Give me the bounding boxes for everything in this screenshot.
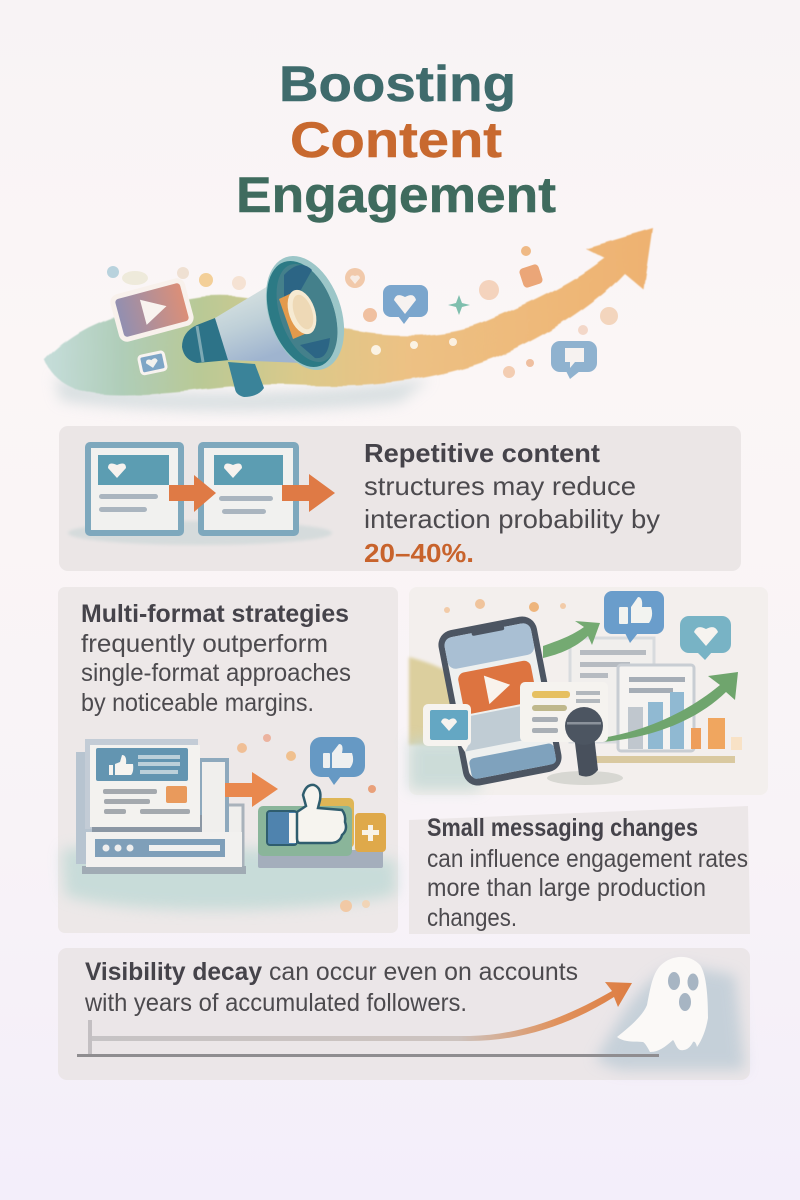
floating hearts and chat bubbles xyxy=(107,246,618,379)
sparkle dots xyxy=(237,734,376,912)
wash shadow xyxy=(55,375,430,410)
illustration: stacked content to thumbs up xyxy=(62,734,396,912)
heart chat tile xyxy=(423,704,471,752)
orange ring xyxy=(279,291,312,339)
text: repetitive content xyxy=(364,438,660,568)
orange dots xyxy=(444,599,566,613)
text: visibility decay xyxy=(84,958,578,1017)
ghost wash xyxy=(595,965,745,1070)
stacked documents xyxy=(76,739,246,874)
text: repetitive content: structures may reduce xyxy=(364,471,636,501)
icon: repeated content cards with arrows xyxy=(68,445,335,545)
text: multi-format strategies: frequently outperform xyxy=(81,630,328,658)
text: multi-format strategies: single-format approaches xyxy=(81,659,351,687)
text: small messaging changes xyxy=(427,814,748,932)
text: small messaging changes: Small messaging changes xyxy=(427,814,698,842)
text: visibility decay: can occur even on accounts xyxy=(269,958,578,986)
text: repetitive content: interaction probability by xyxy=(364,504,660,534)
phone xyxy=(436,614,564,788)
title xyxy=(236,56,556,223)
ghost xyxy=(617,957,708,1052)
panel: small messaging changes xyxy=(409,806,750,934)
back documents xyxy=(570,638,694,751)
text: multi-format strategies: by noticeable margins. xyxy=(81,689,314,717)
text: visibility decay: Visibility decay xyxy=(85,958,262,986)
rising arrow xyxy=(45,228,653,395)
handle xyxy=(228,362,264,397)
title: Boosting xyxy=(279,56,516,112)
megaphone xyxy=(182,245,358,397)
rear band xyxy=(182,318,230,363)
panel: multi-format illustration with phone xyxy=(409,587,768,795)
panel: repetitive content xyxy=(59,426,741,571)
hero illustration: megaphone with rising arrow xyxy=(45,228,653,410)
panel: visibility decay xyxy=(58,948,750,1080)
cone xyxy=(215,286,302,363)
arrow xyxy=(225,772,278,807)
bell opening xyxy=(265,256,349,370)
title: Engagement xyxy=(236,167,556,223)
text: small messaging changes: can influence engagement rates xyxy=(427,845,748,873)
bell rim xyxy=(252,245,358,381)
text: visibility decay: with years of accumulated followers. xyxy=(84,989,467,1017)
text: repetitive content: 20–40%. xyxy=(364,538,474,568)
content card xyxy=(520,682,608,742)
title: Content xyxy=(290,112,502,168)
heart bubble xyxy=(680,616,731,660)
text: multi-format strategies: Multi-format strategies xyxy=(81,600,349,628)
text: small messaging changes: changes. xyxy=(427,904,517,932)
panel: multi-format strategies xyxy=(58,587,398,933)
green arrows xyxy=(543,621,600,658)
text: repetitive content: Repetitive content xyxy=(364,438,600,468)
thumbs up card xyxy=(258,785,386,868)
text: multi-format strategies xyxy=(81,600,351,717)
decay chart xyxy=(77,982,659,1057)
like bubble xyxy=(604,591,664,643)
chat bubble with thumbs up xyxy=(310,737,365,785)
mini bar chart xyxy=(691,718,742,750)
small heart tile xyxy=(138,351,167,374)
text: small messaging changes: more than large production xyxy=(427,874,706,902)
microphone xyxy=(547,707,623,785)
video tile xyxy=(112,279,192,341)
